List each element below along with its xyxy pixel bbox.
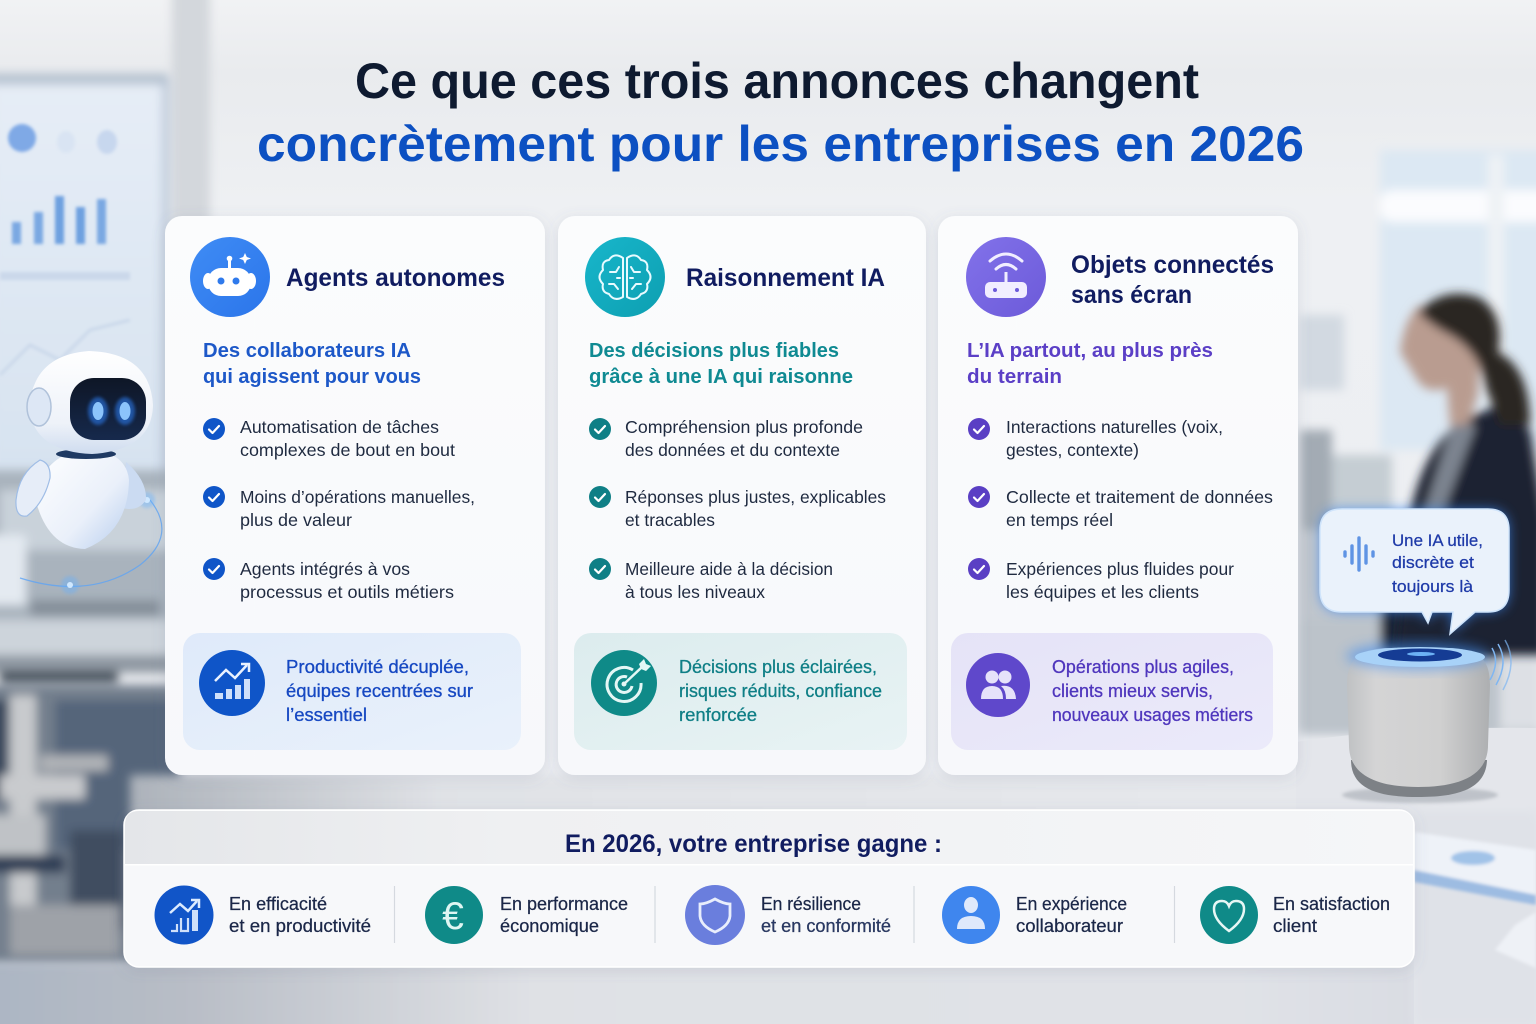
heading: Agents autonomes (286, 264, 505, 292)
bubble text: Une IA utile, (1392, 531, 1483, 550)
checklist (968, 417, 1273, 602)
bottom bands (130, 775, 1536, 820)
checklist: Moins d’opérations manuelles, (240, 487, 475, 507)
woman in background (1396, 294, 1536, 655)
icon: shield (685, 885, 745, 945)
subheading: du terrain (967, 365, 1062, 388)
checklist: plus de valeur (240, 510, 352, 530)
speaker base (1351, 760, 1487, 797)
benefit: expérience: En expérience (1016, 894, 1127, 914)
benefit: expérience: collaborateur (1016, 916, 1123, 936)
bubble text (1392, 531, 1483, 596)
outcome box: clients mieux servis, (1052, 681, 1213, 701)
outcome box (574, 633, 907, 750)
subheading: Des décisions plus fiables (589, 339, 839, 362)
panel: raisonnement IA (558, 216, 926, 775)
icon: target (591, 650, 657, 716)
checklist: Meilleure aide à la décision (625, 559, 833, 579)
icon: growth chart (199, 650, 265, 716)
left office furniture (0, 470, 180, 965)
icon: chart (154, 886, 214, 944)
subheading: grâce à une IA qui raisonne (589, 365, 853, 388)
checklist (589, 417, 886, 602)
checklist: en temps réel (1006, 510, 1113, 530)
robot eyes (88, 397, 135, 425)
benefit: efficacité: et en productivité (229, 916, 371, 936)
checklist: Collecte et traitement de données (1006, 487, 1273, 507)
outcome box: renforcée (679, 705, 757, 725)
robot visor (70, 378, 146, 440)
outcome box: risques réduits, confiance (679, 681, 882, 701)
checklist: à tous les niveaux (625, 582, 765, 602)
benefit: performance: En performance (500, 894, 628, 914)
subheading (589, 339, 853, 388)
benefit: satisfaction: client (1273, 916, 1317, 936)
panel: en 2026 votre entreprise gagne (124, 810, 1414, 967)
heading: Objets connectés (1071, 251, 1274, 279)
speaker sound waves (1490, 640, 1511, 690)
subheading: L’IA partout, au plus près (967, 339, 1213, 362)
panel: agents autonomes (165, 216, 545, 775)
checklist: les équipes et les clients (1006, 582, 1199, 602)
icon: person (942, 886, 1000, 944)
heading (1071, 251, 1274, 309)
checklist (203, 417, 475, 602)
benefit: expérience (942, 886, 1127, 944)
robot left arm (16, 460, 50, 516)
checklist: gestes, contexte) (1006, 440, 1139, 460)
speaker shadow (1342, 787, 1498, 803)
heading: En 2026, votre entreprise gagne : (565, 830, 942, 858)
benefit: performance: économique (500, 916, 599, 936)
subheading (967, 339, 1213, 388)
checklist: Automatisation de tâches (240, 417, 439, 437)
checklist: Agents intégrés à vos (240, 559, 410, 579)
tablet on the table (1414, 832, 1536, 968)
benefit: satisfaction: En satisfaction (1273, 894, 1390, 914)
checklist: et tracables (625, 510, 715, 530)
checklist: Interactions naturelles (voix, (1006, 417, 1223, 437)
subheading (203, 339, 421, 388)
benefit: performance (425, 886, 628, 944)
checklist: des données et du contexte (625, 440, 840, 460)
panel: objets connectés (938, 216, 1298, 775)
benefit: résilience (685, 885, 891, 945)
subheading: Des collaborateurs IA (203, 339, 411, 362)
icon: robot head (190, 237, 270, 317)
benefit: satisfaction (1200, 886, 1390, 944)
checklist: processus et outils métiers (240, 582, 454, 602)
bubble text: discrète et (1392, 553, 1474, 572)
icon: euro (425, 886, 483, 944)
checklist: Réponses plus justes, explicables (625, 487, 886, 507)
title: concrètement pour les entreprises en 2026 (257, 116, 1304, 172)
robot ear (27, 388, 51, 426)
orbit ring around the robot (20, 492, 162, 594)
speaker glowing ring (1346, 642, 1490, 670)
robot neck (56, 449, 116, 459)
outcome box (183, 633, 521, 750)
title: Ce que ces trois annonces changent (355, 53, 1199, 109)
outcome box: équipes recentrées sur (286, 681, 473, 701)
left monitor (0, 74, 169, 496)
outcome box (951, 633, 1273, 750)
benefit: efficacité (154, 886, 371, 944)
outcome box: nouveaux usages métiers (1052, 705, 1253, 725)
speaker body (1347, 648, 1490, 787)
bubble body (1320, 509, 1509, 634)
benefit: efficacité: En efficacité (229, 894, 327, 914)
title (257, 53, 1304, 172)
table surface (1296, 728, 1536, 1024)
decorative robot with orbit (16, 351, 162, 594)
outcome box: Productivité décuplée, (286, 657, 469, 677)
checklist: complexes de bout en bout (240, 440, 455, 460)
icon: people (966, 653, 1030, 717)
outcome box: l’essentiel (286, 705, 367, 725)
icon: connected device (966, 237, 1046, 317)
outcome box: Opérations plus agiles, (1052, 657, 1234, 677)
icon: sound wave (1345, 538, 1373, 570)
benefit: résilience: et en conformité (761, 916, 891, 936)
robot head (29, 351, 153, 454)
heading: Raisonnement IA (686, 264, 885, 292)
robot body (37, 449, 129, 549)
icon: euro: € (442, 895, 464, 938)
icon: heart (1200, 886, 1258, 944)
benefit: résilience: En résilience (761, 894, 861, 914)
checklist: Expériences plus fluides pour (1006, 559, 1234, 579)
checklist: Compréhension plus profonde (625, 417, 863, 437)
icon: brain (585, 237, 665, 317)
heading: sans écran (1071, 281, 1192, 309)
outcome box: Décisions plus éclairées, (679, 657, 877, 677)
robot right arm (122, 462, 146, 509)
window on the right (1380, 150, 1536, 450)
bubble text: toujours là (1392, 577, 1474, 596)
subheading: qui agissent pour vous (203, 365, 421, 388)
voice speech bubble (1320, 509, 1509, 634)
smart speaker (1342, 640, 1511, 803)
